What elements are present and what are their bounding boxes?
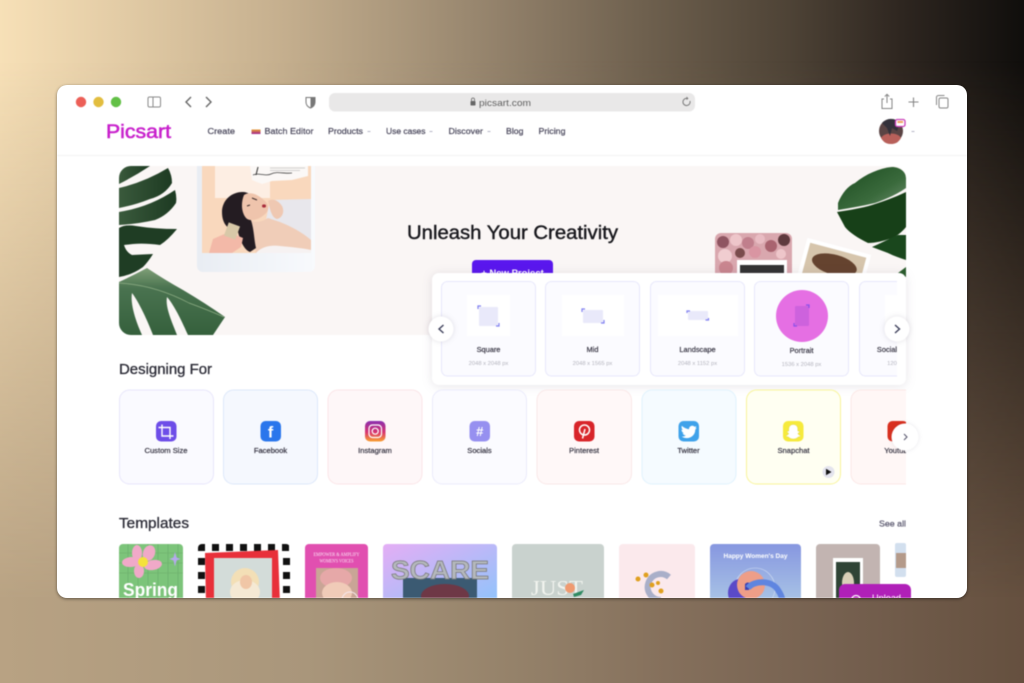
size card: portrait [754, 282, 848, 376]
navigation bar [106, 119, 914, 144]
avatar [879, 119, 905, 144]
card: twitter [642, 390, 736, 484]
carousel arrow: left [428, 316, 454, 342]
new project button: + New Project [481, 268, 545, 279]
card: custom size: Custom Size [144, 446, 188, 455]
template: happy women's day [709, 543, 802, 598]
new project button [471, 259, 554, 274]
see all link: See all [879, 518, 906, 528]
template: chrome typography [382, 544, 498, 598]
template: checkered portrait [198, 544, 290, 604]
template: pink women's day: WOMEN'S VOICES [320, 560, 354, 564]
icon: play badge [822, 466, 834, 478]
right monstera leaf [837, 167, 906, 277]
size card: portrait: 1536 x 2048 px [782, 362, 821, 368]
nav links: Pricing [538, 126, 566, 136]
browser window [57, 85, 967, 598]
size card: square: 2048 x 2048 px [469, 361, 508, 367]
template: spring [119, 543, 183, 604]
canvas size panel [428, 273, 954, 385]
nav links: Discover [448, 126, 483, 136]
nav dropdown carets [368, 130, 914, 132]
icon: tabs [936, 95, 948, 108]
size card: mid: 2048 x 1565 px [573, 361, 612, 367]
icon: privacy shield [306, 98, 315, 108]
collage photo card [197, 166, 312, 272]
card: facebook: Facebook [254, 446, 287, 455]
address bar [329, 93, 695, 112]
card: snapchat: Snapchat [777, 446, 810, 455]
size card: mid [546, 282, 640, 376]
size card: mid: Mid [587, 345, 598, 354]
icon: sidebar [148, 97, 160, 107]
hero banner [119, 150, 906, 335]
card: facebook: f [268, 424, 274, 442]
template: chrome typography: SCARE [391, 555, 489, 585]
carousel arrow: right [884, 316, 910, 342]
icon: new tab plus [908, 98, 918, 107]
window control dots [76, 97, 121, 107]
template: happy women's day: Happy Women's Day [724, 553, 788, 560]
flower photo card [714, 232, 792, 274]
carousel arrow: platform row [892, 424, 918, 450]
platform cards row [120, 390, 945, 484]
tilted portrait photo [799, 239, 870, 274]
size card: social: Social [877, 345, 897, 354]
card: socials: # [476, 424, 484, 439]
card: socials [432, 390, 526, 484]
size card: social: 1200 x 1200 px [887, 361, 927, 367]
heading: designing for: Designing For [119, 362, 212, 378]
template: partial photo [895, 543, 906, 577]
size card: portrait: Portrait [790, 346, 813, 355]
template: floral letter [619, 544, 695, 604]
toolbar [76, 93, 948, 112]
template thumbnails [118, 542, 907, 598]
card: snapchat [746, 390, 840, 484]
card: facebook [224, 390, 318, 484]
left monstera leaf [119, 166, 225, 335]
title: Unleash Your Creativity [407, 222, 618, 244]
logo: Picsart [106, 121, 172, 143]
card: youtube: Youtube [884, 446, 912, 455]
template: framed photo [816, 544, 880, 604]
nav links: Products [328, 126, 363, 136]
nav links [208, 126, 566, 136]
size card: square [442, 282, 536, 376]
size card: landscape: 2048 x 1152 px [678, 361, 717, 367]
card: instagram [328, 390, 422, 484]
icon: back and forward chevrons [186, 97, 211, 107]
size card: square: Square [477, 345, 500, 354]
nav links: Batch Editor [264, 126, 314, 136]
nav links: Use cases [386, 126, 426, 136]
template: pink women's day: EMPOWER & AMPLIFY [314, 553, 360, 558]
address bar: picsart.com [479, 98, 531, 109]
card: youtube [850, 390, 907, 485]
size card: landscape [650, 282, 744, 376]
nav links: Blog [506, 126, 524, 136]
heading: templates: Templates [119, 516, 189, 532]
card: socials: Socials [467, 446, 492, 455]
size card: landscape: Landscape [679, 345, 716, 354]
icon: share [882, 94, 892, 108]
card: custom size [120, 390, 214, 484]
template: just [512, 544, 604, 604]
card: instagram: Instagram [358, 446, 392, 455]
card: pinterest: Pinterest [569, 446, 600, 455]
card: twitter: Twitter [677, 446, 700, 455]
template: pink women's day [304, 543, 369, 598]
nav links: Create [208, 126, 235, 136]
upload button [839, 584, 911, 608]
card: pinterest [537, 390, 632, 484]
size card: social [859, 281, 898, 376]
